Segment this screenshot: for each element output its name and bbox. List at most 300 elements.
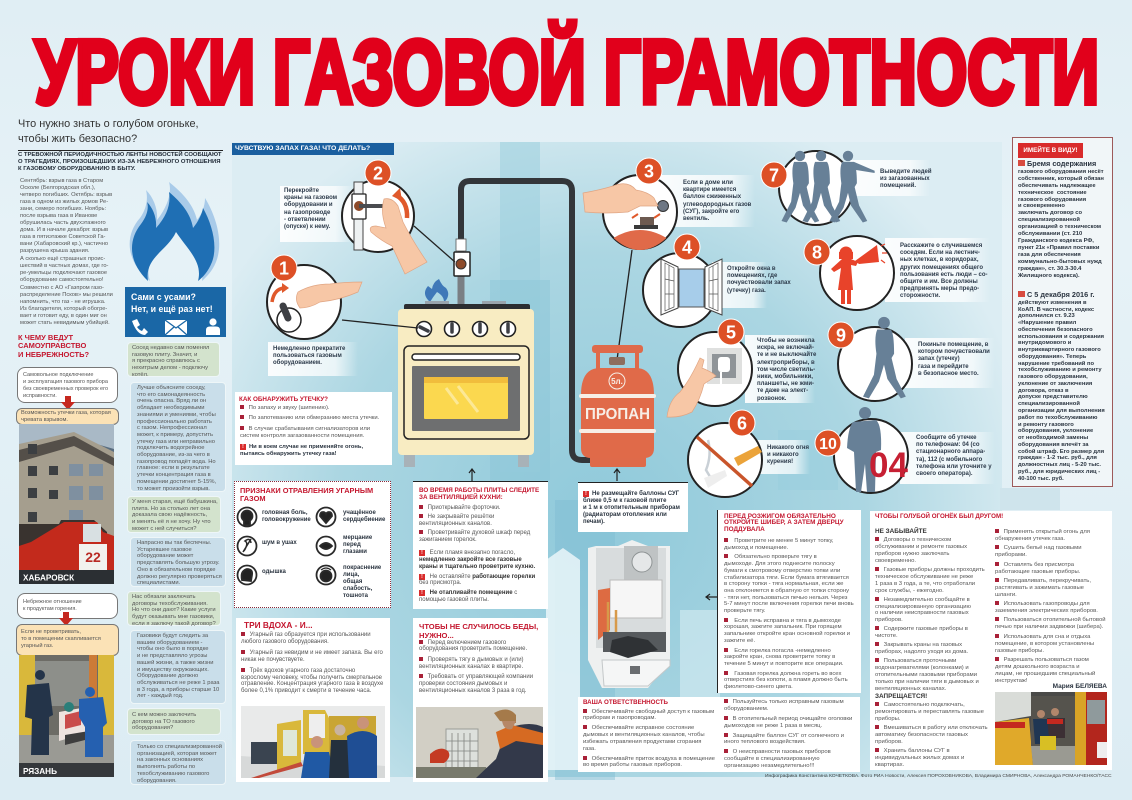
panel: CO poisoning symptoms: покраснение bbox=[343, 565, 381, 571]
text: prohibited continued: шланги. bbox=[995, 592, 1017, 598]
text: maintenance burden: Жилищного кодекса). bbox=[1018, 272, 1080, 278]
callout: self connection: и эксплуатация газового прибора bbox=[23, 379, 108, 385]
step 8 circle bbox=[804, 236, 894, 310]
text: do not forget: Самостоятельно подключать, bbox=[884, 702, 965, 708]
author: Мария БЕЛЯЕВА bbox=[1053, 683, 1107, 690]
step 6 text: курения! bbox=[767, 459, 793, 465]
text: do not forget: Вмешиваться в работу или отключать bbox=[884, 725, 988, 731]
heading: to avoid trouble: ЧТОБЫ НЕ СЛУЧИЛОСЬ БЕДЫ, bbox=[419, 622, 538, 631]
text: responsibility column 2: сообщайте в специализированную bbox=[724, 756, 820, 762]
step 7 text: помещений. bbox=[880, 183, 916, 189]
dialogue bubble 5: будут оказывать мне газовики, bbox=[132, 614, 214, 620]
dialogue bubble 6: вашим оборудованием - bbox=[137, 640, 202, 646]
step 2 text: (опуске) к нему. bbox=[284, 224, 330, 230]
step 1 circle: 1 bbox=[279, 258, 289, 278]
intro text: зани, семеро погибших. Ноябрь: bbox=[20, 206, 106, 212]
step 6 circle bbox=[688, 410, 762, 497]
step 3 text: углеводородных газов bbox=[683, 202, 751, 208]
text: fines since 2016 bbox=[1018, 290, 1105, 482]
text: do not forget bbox=[875, 527, 988, 768]
step 5 text: розвонок. bbox=[757, 396, 786, 402]
heading: CO poisoning bbox=[240, 486, 373, 503]
step 4 circle: 4 bbox=[682, 238, 692, 258]
dialogue bubble 8: на законных основаниях bbox=[137, 757, 203, 763]
dialogue bubble 6: в 3 года, а приборы старше 10 bbox=[137, 687, 219, 693]
heading: before ignition: ПОДДУВАЛА bbox=[724, 526, 765, 533]
step 2 text: краны на газовом bbox=[284, 195, 337, 201]
dialogue bubble 1: котёл. bbox=[132, 372, 149, 378]
dialogue bubble 1 bbox=[127, 342, 220, 377]
text: fines since 2016: договора, отказ в bbox=[1018, 388, 1069, 394]
text: maintenance burden: газового оборудования bbox=[1018, 197, 1086, 203]
text: to avoid trouble: Проверять тягу в дымовых и (или) bbox=[428, 657, 524, 663]
step 2 text bbox=[284, 187, 337, 230]
step 8 text: общите и им. Все должны bbox=[900, 279, 978, 285]
heading: CO poisoning: ПРИЗНАКИ ОТРАВЛЕНИЯ УГАРНЫМ bbox=[240, 486, 373, 495]
dialogue bubble 2: то может произойти взрыв. bbox=[137, 486, 210, 492]
text: responsibility column 2: О неисправности газовых приборов bbox=[733, 749, 831, 755]
step 10 text: телефона или уточните у bbox=[916, 464, 992, 470]
heading: before ignition bbox=[724, 512, 844, 533]
dialogue bubble 1: Сосед недавно сам поменял bbox=[132, 345, 209, 351]
step 2 text: на газопроводе bbox=[284, 210, 330, 216]
callout: self connection bbox=[17, 367, 118, 403]
step 5 text: планшеты, не жми- bbox=[757, 381, 814, 387]
heading: friendly flame: ЧТОБЫ ГОЛУБОЙ ОГОНЁК БЫЛ ДРУГОМ! bbox=[875, 513, 1003, 520]
step 9 text: запах (утечку) bbox=[918, 356, 960, 362]
text: before ignition: стабилизатора тяги. Если бумага втягивается bbox=[724, 575, 849, 581]
text: before ignition: Если печь исправна и тяга в дымоходе bbox=[734, 618, 841, 624]
dialogue bubble 2: оборудование, из-за чего в bbox=[137, 452, 210, 458]
photo: gas service van bbox=[995, 692, 1107, 765]
panel: CO poisoning symptoms: учащённое bbox=[343, 510, 376, 516]
callout: gas leak: чревата взрывом. bbox=[21, 417, 68, 423]
text: do not forget: приборах, надолго уходя из дома. bbox=[875, 649, 968, 655]
step 10 text: по телефонам: 04 (со bbox=[916, 442, 980, 448]
step 10 circle: 10 bbox=[819, 436, 837, 453]
text: kitchen ventilation: зажиганием горелок. bbox=[419, 537, 477, 543]
step 3 text: квартире имеется bbox=[683, 187, 736, 193]
panel: CO poisoning symptoms: одышка bbox=[262, 569, 286, 575]
text: responsibility column 2: дымоходов не реже 1 раза в месяц. bbox=[724, 723, 822, 729]
text: do not forget: ЗАПРЕЩАЕТСЯ! bbox=[875, 693, 927, 700]
text: kitchen ventilation bbox=[419, 504, 535, 603]
text: before ignition: Обязательно проверьте тягу в bbox=[734, 554, 817, 560]
step 3 circle bbox=[583, 158, 677, 250]
icons: phone, mail, person bbox=[132, 318, 220, 335]
heading: consequences: И НЕБРЕЖНОСТЬ? bbox=[18, 350, 89, 359]
dialogue bubble 2: газопровод попадёт вода. Но bbox=[137, 459, 216, 465]
dialogue bubble 2: утечки концентрация газа в bbox=[137, 472, 211, 478]
text: fines since 2016: внутридомового и bbox=[1018, 340, 1071, 346]
text: detect leak: Ни в коем случае не применяйте огонь, bbox=[249, 444, 363, 450]
step 8 text: других помещениях общего bbox=[900, 265, 983, 271]
step 3 text: (СУГ), закройте его bbox=[683, 209, 739, 215]
text: responsibility column 2: В отопительный период очищайте оголовки bbox=[733, 716, 852, 722]
text: do not forget: приборов нужно заключать bbox=[875, 551, 949, 557]
text: detect leak: систем контроля загазованности помещения. bbox=[240, 433, 364, 439]
step 8 text: соседям. Если на лестнич- bbox=[900, 250, 980, 256]
step 2 circle bbox=[342, 160, 455, 274]
step 4 text: почувствовали запах bbox=[727, 280, 791, 286]
step 4 text bbox=[727, 265, 791, 294]
arrow: to cylinder rule bbox=[614, 469, 620, 481]
intro text: газа в одном из жилых домов Ре- bbox=[20, 199, 108, 205]
lead paragraph: О ТРАГЕДИЯХ, ПРОИЗОШЕДШИХ ИЗ-ЗА НЕБРЕЖНОГО ОТНОШЕНИЯ bbox=[18, 159, 220, 165]
intro text: газа в пятиэтажке Советской Га- bbox=[20, 234, 105, 240]
panel: CO poisoning symptoms: тошнота bbox=[343, 593, 368, 599]
text: fines since 2016: оборудования влечёт за bbox=[1018, 442, 1088, 448]
text: responsibility column 2 bbox=[724, 699, 852, 769]
dialogue bubble 2: профессионально работать bbox=[137, 419, 212, 425]
text: detect leak: ! bbox=[242, 444, 244, 450]
photo: Khabarovsk bbox=[19, 424, 114, 584]
step 9 text bbox=[918, 342, 990, 377]
step 1 text: Немедленно прекратите bbox=[273, 346, 345, 352]
dialogue bubble 2: подключить водогрейное bbox=[137, 445, 205, 451]
text: prohibited continued: Использовать газопроводы для bbox=[1004, 601, 1090, 607]
step 4 text: помещениях, где bbox=[727, 273, 777, 279]
step 10 circle bbox=[815, 407, 908, 493]
lead paragraph: С ТРЕВОЖНОЙ ПЕРИОДИЧНОСТЬЮ ЛЕНТЫ НОВОСТЕЙ СООБЩАЮТ bbox=[18, 152, 222, 158]
text: kitchen ventilation: Не оставляйте работающие горелки bbox=[430, 574, 535, 580]
text: maintenance burden: обеспечивать надлежащее bbox=[1018, 183, 1096, 189]
dialogue bubble 6: и не представляло угрозы bbox=[137, 653, 207, 659]
intro text: шествий в частных домах, где го- bbox=[20, 263, 108, 269]
text: fines since 2016: специализированной bbox=[1018, 401, 1080, 407]
text: detect leak: По запаху и звуку (шипению). bbox=[249, 404, 330, 410]
panel: CO poisoning symptoms: глазами bbox=[343, 549, 367, 555]
heading: to avoid trouble bbox=[419, 622, 538, 640]
text: do not forget: приборы. bbox=[875, 716, 901, 722]
text: responsibility column 2: Защищайте баллон СУГ от солнечного и bbox=[733, 733, 844, 739]
step 1 text: пользоваться газовым bbox=[273, 353, 342, 359]
lead paragraph bbox=[18, 150, 223, 172]
text: maintenance burden: собственник, который обязан bbox=[1018, 176, 1104, 182]
heading: keep in mind: ИМЕЙТЕ В ВИДУ! bbox=[1023, 147, 1078, 154]
gas cylinder bbox=[579, 250, 656, 467]
text: prohibited continued: Передавливать, перекручивать, bbox=[1004, 578, 1091, 584]
text: kitchen ventilation: немедленно закройте все газовые bbox=[419, 557, 522, 563]
text: prohibited continued: приборами. bbox=[995, 552, 1027, 558]
heading: consequences: САМОУПРАВСТВО bbox=[18, 341, 86, 350]
dialogue bubble 1: нехитрым делом - подключу bbox=[132, 365, 208, 371]
text: cylinder placement: ! bbox=[585, 491, 587, 497]
dialogue bubble 4: Напрасно вы так беспечны. bbox=[137, 540, 211, 546]
text: responsibility column 1: газа. bbox=[583, 746, 596, 752]
text: fines since 2016: допуске представителю bbox=[1018, 394, 1088, 400]
panel: three breaths bbox=[236, 618, 390, 782]
photo: ambulance crew bbox=[241, 706, 385, 778]
dialogue bubble 4: оборудование может bbox=[137, 553, 193, 559]
dialogue bubble 2: очень опасна. Вряд ли он bbox=[137, 398, 206, 404]
text: do not forget: 1 раза в 3 года, а те, что отработали bbox=[875, 581, 975, 587]
heading: responsibility: ВАША ОТВЕТСТВЕННОСТЬ bbox=[583, 699, 668, 706]
text: before ignition: она отклоняется в обратную от топки сторону bbox=[724, 588, 849, 594]
panel: how to detect a leak bbox=[235, 392, 392, 465]
text: before ignition: закройте кран, снова проветрите топку в bbox=[724, 654, 835, 660]
text: do not forget: Хранить баллоны СУГ в bbox=[884, 748, 950, 754]
intro text: Сентябрь: взрыв газа в Старом bbox=[20, 178, 103, 184]
text: prohibited continued: Использовать для сна и отдыха bbox=[1004, 634, 1090, 640]
panel: CO poisoning symptoms: головокружение bbox=[262, 517, 311, 523]
dialogue bubble 5: Но что они дают? Какие услуги bbox=[132, 607, 216, 613]
text: three breaths: Угарный газ невидим и не имеет запаха. Вы его bbox=[250, 650, 383, 656]
text: responsibility column 2: Пользуйтесь только исправным газовым bbox=[733, 699, 844, 705]
text: fines since 2016: «Нарушение правил bbox=[1018, 320, 1076, 326]
text: three breaths: Угарный газ образуется при использовании bbox=[250, 632, 371, 638]
text: responsibility column 2: организацию незамедлительно!!! bbox=[724, 763, 814, 769]
text: responsibility column 1: Обеспечивайте исправное состояние bbox=[592, 725, 694, 731]
callout: combustion products bbox=[17, 593, 118, 619]
text: cylinder placement: Не размещайте баллоны СУГ bbox=[592, 491, 679, 497]
step 9 text: Покиньте помещение, в bbox=[918, 342, 988, 348]
panel: keep in mind bbox=[1012, 137, 1113, 487]
text: before ignition: фиолетово-синего цвета. bbox=[724, 684, 793, 690]
step 4 circle bbox=[643, 234, 722, 327]
arrow: red down 1 bbox=[61, 396, 75, 408]
text: fines since 2016: руб., для юридических лиц - bbox=[1018, 469, 1100, 475]
step 8 text: пользования есть люди – со- bbox=[900, 272, 987, 278]
step 5 text: электроприборы, в bbox=[757, 360, 815, 366]
text: three breaths: взрослому человеку, чтобы получить смертельное bbox=[241, 675, 382, 681]
text: do not forget: чистоте. bbox=[875, 633, 898, 639]
intro text: распределение Псков» мы решили bbox=[20, 292, 113, 298]
dialogue bubble 7 bbox=[127, 708, 221, 735]
text: to avoid trouble: вентиляционных каналах в квартире. bbox=[419, 664, 523, 670]
intro text: Совместно с АО «Газпром газо- bbox=[20, 285, 104, 291]
step 6 text: Никакого огня bbox=[767, 445, 809, 451]
dialogue bubble 2: главное: если в результате bbox=[137, 465, 210, 471]
gas cylinder: ПРОПАН bbox=[585, 406, 650, 423]
lead paragraph: К ГАЗОВОМУ ОБОРУДОВАНИЮ В БЫТУ. bbox=[18, 166, 135, 172]
text: kitchen ventilation: ! bbox=[421, 550, 423, 556]
text: maintenance burden bbox=[1018, 159, 1104, 278]
step 8 circle: 8 bbox=[812, 242, 822, 262]
text: kitchen ventilation: Проветривайте духовой шкаф перед bbox=[428, 530, 530, 536]
step 8 text: ных клетках, в коридорах, bbox=[900, 257, 979, 263]
text: detect leak: В случае срабатывания сигнализаторов или bbox=[249, 426, 370, 432]
photo: Khabarovsk: 22 bbox=[85, 549, 101, 565]
step 5 text: том числе светиль- bbox=[757, 367, 815, 373]
text: responsibility column 1: избежать отравления продуктами сгорания bbox=[583, 739, 701, 745]
dialogue bubble 6: Газовики будут следить за bbox=[137, 633, 208, 639]
dialogue bubble 4: Устаревшее газовое bbox=[137, 547, 192, 553]
text: fines since 2016: техобслуживанию и ремонту bbox=[1018, 367, 1102, 373]
text: detect leak: По запотеванию или обмерзанию места утечки. bbox=[249, 415, 379, 421]
heading: keep in mind bbox=[1018, 143, 1083, 158]
panel: CO poisoning symptoms: слабость, bbox=[343, 586, 372, 592]
dialogue bubble 2 bbox=[130, 382, 226, 492]
text: to avoid trouble bbox=[419, 640, 533, 694]
step 7 text bbox=[880, 168, 932, 189]
step 4 text: Откройте окна в bbox=[727, 266, 776, 272]
step 4 text: (утечку) газа. bbox=[727, 288, 766, 294]
photo: Khabarovsk: ХАБАРОВСК bbox=[23, 574, 75, 582]
step 1 text bbox=[273, 346, 346, 366]
text: before ignition: в сторону топки - тяга нормальная, если же bbox=[724, 581, 843, 587]
dialogue bubble 8: организацией, которая может bbox=[137, 751, 217, 757]
text: fines since 2016: оборудования, уклонение bbox=[1018, 428, 1093, 434]
panel: kitchen ventilation bbox=[413, 481, 548, 609]
intro text: обрушилась часть двухэтажного bbox=[20, 220, 106, 226]
text: do not forget: Содержите газовые приборы в bbox=[884, 626, 968, 632]
text: fines since 2016: от необходимой замены bbox=[1018, 435, 1088, 441]
dialogue bubble 6: и имуществу окружающих. bbox=[137, 667, 209, 673]
text: maintenance burden: Гражданского кодекса РФ, bbox=[1018, 238, 1094, 244]
step 2 text: - ответвлении bbox=[284, 217, 326, 223]
panel: before ignition bbox=[717, 510, 861, 693]
text: prohibited continued: растягивать и зажимать газовые bbox=[995, 585, 1084, 591]
intro text: Осколе (Белгородская обл.), bbox=[20, 185, 95, 191]
step 3 text bbox=[683, 180, 752, 222]
intro text: четверо погибших. Октябрь: взрыв bbox=[20, 192, 112, 198]
step 2 circle: 2 bbox=[373, 164, 383, 184]
step 5 text: те и не выключайте bbox=[757, 352, 816, 358]
text: to avoid trouble: Перед включением газового bbox=[428, 640, 506, 646]
dialogue bubble 1: я прекрасно справлюсь с bbox=[132, 358, 200, 364]
text: responsibility column 1: во время работы газовых приборов. bbox=[583, 762, 682, 768]
text: prohibited continued: обнаружения утечек газа. bbox=[995, 536, 1065, 542]
text: prohibited continued: инструктаж! bbox=[995, 678, 1027, 684]
text: prohibited continued: детям дошкольного возраста и bbox=[995, 664, 1080, 670]
heading: three breaths: ТРИ ВДОХА - И... bbox=[244, 620, 313, 630]
dialogue bubble 2: утечку газа или неправильно bbox=[137, 439, 215, 445]
panel: friendly blue flame bbox=[870, 511, 1112, 770]
dialogue bubble 2: с газом. Непрофессионал bbox=[137, 425, 207, 431]
dialogue bubble 3: У меня старая, ещё бабушкина, bbox=[132, 499, 218, 505]
text: three breaths: любого газового оборудования. bbox=[241, 639, 329, 645]
panel: CO poisoning symptoms: общая bbox=[343, 579, 362, 585]
heading: consequences bbox=[18, 333, 89, 359]
text: before ignition: течение 5 минут и повторите все операции. bbox=[724, 661, 844, 667]
text: do not forget: приборов. bbox=[875, 617, 903, 623]
text: kitchen ventilation: ! bbox=[421, 574, 423, 580]
text: prohibited continued: печью при наличии задвижки (шибера). bbox=[995, 624, 1103, 630]
text: maintenance burden: Бремя содержания bbox=[1027, 159, 1096, 168]
text: do not forget: Пользоваться проточными bbox=[884, 658, 956, 664]
text: fines since 2016: организации для выполнения bbox=[1018, 408, 1105, 414]
dialogue bubble 6: вашей жизни, а также жизни bbox=[137, 660, 214, 666]
panel: CO poisoning symptoms: лица, bbox=[343, 572, 359, 578]
text: fines since 2016: действуют изменения в bbox=[1018, 300, 1087, 306]
text: do not forget: срок службы, - ежегодно. bbox=[875, 588, 944, 594]
step 10 text: та), 112 (с мобильного bbox=[916, 457, 982, 463]
text: detect leak: пытаясь обнаружить утечку газа! bbox=[240, 451, 337, 457]
callout: self connection: Самовольное подключение bbox=[23, 372, 93, 378]
text: kitchen ventilation: помощью газовой плиты. bbox=[419, 597, 489, 603]
text: do not forget: только при наличии тяги в дымовых и bbox=[875, 679, 979, 685]
text: fines since 2016: нарушение требований по bbox=[1018, 361, 1094, 367]
intro text bbox=[20, 178, 113, 326]
text: maintenance burden: заключать договор со bbox=[1018, 210, 1082, 216]
text: three breaths bbox=[241, 631, 384, 694]
dialogue bubble 8: оборудования. bbox=[137, 778, 177, 784]
dialogue bubble 3: и менять её я не хочу. Ну что bbox=[132, 519, 211, 525]
callout: self connection: исправности. bbox=[23, 393, 57, 399]
intro text: после взрыва газа в Иванове bbox=[20, 213, 97, 219]
step 3 text: вентиль. bbox=[683, 216, 709, 222]
icon: blue flame bbox=[130, 182, 220, 281]
text: to avoid trouble: вентиляционных каналов 3 раза в год. bbox=[419, 688, 527, 694]
text: before ignition: запальнике откройте кран основной горелки и bbox=[724, 631, 850, 637]
subtitle: Что нужно знать о голубом огоньке, bbox=[18, 118, 199, 130]
gas pipe bbox=[461, 181, 592, 460]
text: do not forget: о наличии неисправности газовых bbox=[875, 610, 969, 616]
text: prohibited continued: Пользоваться отопительной бытовой bbox=[1004, 617, 1106, 623]
text: maintenance burden: коммунально-бытовых нужд bbox=[1018, 259, 1102, 265]
dialogue bubble 2: Лучше объясните соседу, bbox=[137, 385, 206, 391]
text: three breaths: более 0,1% приводит к смерти в течение часа. bbox=[241, 688, 371, 694]
text: three breaths: отравление. Концентрация угарного газа в воздухе bbox=[241, 681, 383, 687]
text: do not forget: Незамедлительно сообщайте в bbox=[884, 597, 970, 603]
text: kitchen ventilation: вентиляционных каналов. bbox=[419, 521, 492, 527]
text: before ignition: зажгите её. bbox=[724, 638, 755, 644]
text: prohibited continued: работающие газовые приборы. bbox=[995, 569, 1080, 575]
step 1 text: оборудованием. bbox=[273, 360, 322, 366]
text: do not forget: водонагревателями (колонками) и bbox=[875, 665, 969, 671]
heading: kitchen ventilation: ЗА ВЕНТИЛЯЦИЕЙ КУХНИ: bbox=[419, 494, 503, 501]
text: do not forget: квартирах. bbox=[875, 762, 904, 768]
photo: Ryazan: РЯЗАНЬ bbox=[23, 767, 57, 776]
step 10 text: стационарного аппара- bbox=[916, 449, 985, 455]
panel: CO poisoning symptoms: шум в ушах bbox=[262, 540, 297, 546]
text: fines since 2016: использования и содержания bbox=[1018, 334, 1104, 340]
panel: CO poisoning symptoms: головная боль, bbox=[262, 510, 308, 516]
text: before ignition: дымоходе. Для этого поднесите полоску bbox=[724, 561, 835, 567]
text: prohibited continued: помещение, в котором установлены bbox=[995, 641, 1094, 647]
text: prohibited continued: заземления электрических приборов. bbox=[995, 608, 1098, 614]
callout: carbon monoxide: угарный газ. bbox=[21, 643, 53, 649]
step 7 text: Выведите людей bbox=[880, 169, 932, 175]
step 2 text: Перекройте bbox=[284, 188, 319, 194]
step 6 text: и никакого bbox=[767, 452, 799, 458]
photo: Ryazan bbox=[19, 655, 114, 777]
text: do not forget: Договоры о техническом bbox=[884, 537, 951, 543]
step 9 text: в безопасное место. bbox=[918, 371, 979, 377]
step 8 text: предпринять меры предо- bbox=[900, 286, 979, 292]
panel: CO poisoning symptoms: мерцание bbox=[343, 535, 372, 541]
text: do not forget: отопительными газовыми приборами bbox=[875, 672, 977, 678]
text: responsibility column 1: приборам и газопроводам. bbox=[583, 715, 656, 721]
step 10 text: своего оператора). bbox=[916, 471, 973, 477]
text: kitchen ventilation: ! bbox=[421, 590, 423, 596]
text: maintenance burden: газового оборудования несёт bbox=[1018, 169, 1104, 175]
text: cylinder placement: (радиаторам отопления или bbox=[583, 512, 667, 518]
illustration: gas boiler bbox=[588, 540, 670, 688]
dialogue bubble 6: Оборудование должно bbox=[137, 673, 198, 679]
callout: combustion products: Небрежное отношение bbox=[23, 599, 82, 605]
step 8 text: Расскажите о случившемся bbox=[900, 243, 982, 249]
text: do not forget: специализированную организацию bbox=[875, 604, 971, 610]
arrow: to boiler bbox=[706, 594, 717, 600]
text: fines since 2016: граждан - 1-2 тыс. руб., для bbox=[1018, 455, 1097, 461]
step 6 circle: 6 bbox=[737, 414, 747, 434]
text: three breaths: Трёх вдохов угарного газа достаточно bbox=[250, 668, 355, 674]
text: do not forget: вентиляционных каналах. bbox=[875, 686, 946, 692]
text: prohibited continued: лицам, не прошедшим специальный bbox=[995, 671, 1095, 677]
text: maintenance burden: техническое состояние bbox=[1018, 190, 1087, 196]
icon: stove flame bbox=[425, 279, 448, 302]
step 1 circle bbox=[267, 255, 418, 339]
intro text: разрушена крыша здания. bbox=[20, 248, 89, 254]
intro text: вает и готовит еду, в один миг он bbox=[20, 313, 107, 319]
panel: sami s usami: Сами с усами? bbox=[131, 292, 196, 302]
text: to avoid trouble: оборудования проветрить помещение. bbox=[419, 646, 527, 652]
text: kitchen ventilation: без присмотра. bbox=[419, 580, 461, 586]
step 5 circle: 5 bbox=[726, 322, 736, 342]
subtitle bbox=[18, 118, 199, 144]
